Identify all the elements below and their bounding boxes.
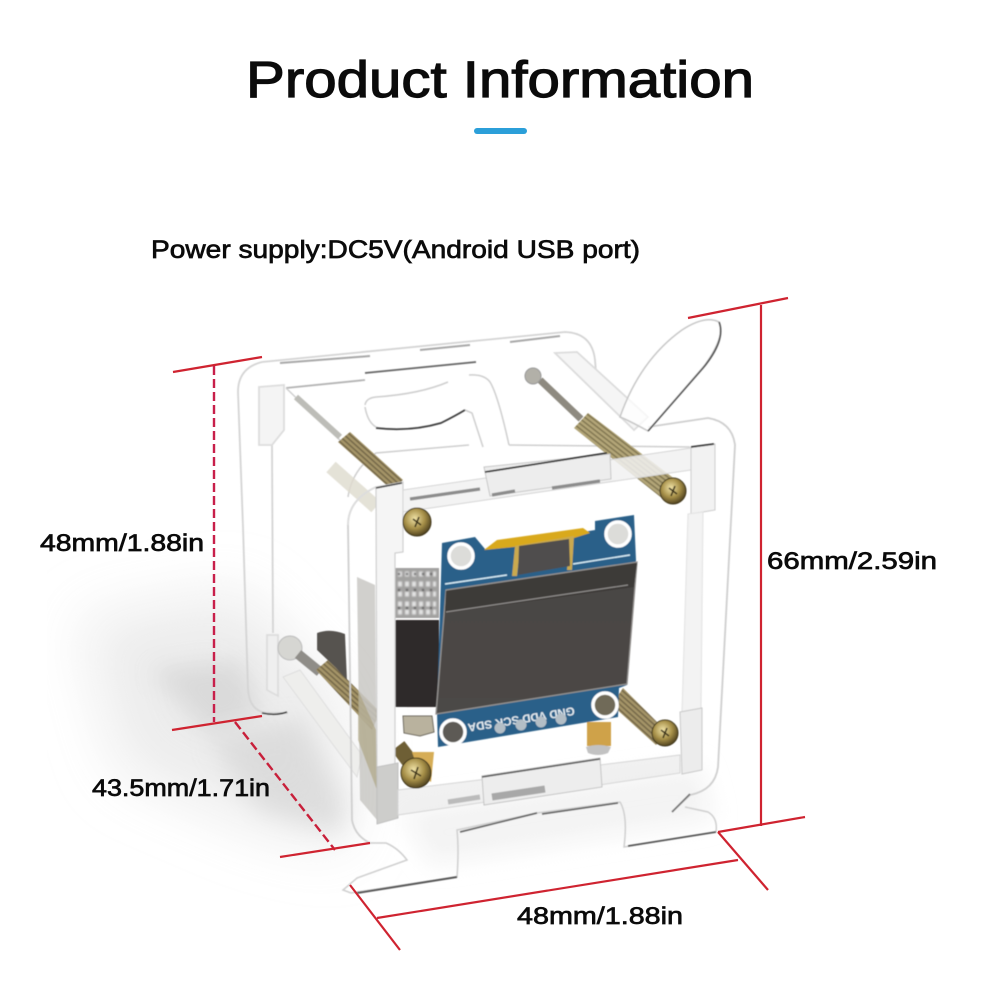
pin labels: GND VDD SCK SDA bbox=[467, 704, 575, 733]
top bar bbox=[403, 448, 691, 512]
OLED display glass bbox=[436, 562, 637, 714]
lower front standoffs bbox=[398, 688, 668, 782]
back pillars and tabs bbox=[259, 385, 284, 445]
label: 48mm width: 48mm/1.88in bbox=[517, 903, 683, 930]
nut on lower standoff bbox=[403, 716, 434, 736]
gold flex cable bbox=[484, 528, 590, 576]
width dimension: 48mm bbox=[350, 832, 768, 950]
label: 43.5mm depth: 43.5mm/1.71in bbox=[92, 775, 270, 802]
title: Product Information bbox=[246, 51, 754, 108]
height dimension: 48mm dashed bbox=[172, 357, 262, 730]
back acrylic frame bbox=[238, 332, 648, 714]
power supply text: Power supply:DC5V(Android USB port) bbox=[151, 236, 640, 264]
lower rear standoff bbox=[278, 631, 380, 777]
rear brass standoff left bbox=[296, 397, 403, 507]
top acrylic plate contours bbox=[286, 375, 690, 497]
label: 48mm height: 48mm/1.88in bbox=[40, 530, 204, 557]
height dimension: 66mm bbox=[688, 298, 805, 832]
right pillar bbox=[691, 444, 715, 514]
rear brass standoff right bbox=[525, 368, 684, 503]
dimension lines bbox=[172, 298, 805, 950]
OLED module bbox=[436, 515, 637, 747]
bottom bar bbox=[398, 755, 680, 815]
acrylic feet bbox=[343, 802, 716, 893]
front acrylic frame bbox=[348, 418, 735, 843]
left pillar bbox=[376, 482, 403, 775]
OLED blue circuit board bbox=[437, 515, 636, 747]
left gray side panel bbox=[357, 577, 377, 820]
product photo: acrylic OLED cube bbox=[80, 320, 735, 893]
depth dimension: 43.5mm dashed bbox=[235, 722, 370, 857]
mounting holes bbox=[441, 522, 630, 744]
front screws bbox=[401, 478, 686, 788]
solder pads bbox=[494, 714, 566, 734]
acrylic lever bbox=[620, 320, 721, 431]
outer contour bbox=[348, 418, 735, 843]
title underline accent bbox=[474, 128, 527, 134]
label: 66mm height: 66mm/2.59in bbox=[767, 548, 937, 575]
rear electronics module bbox=[395, 568, 439, 707]
floor shadow bbox=[80, 590, 715, 865]
